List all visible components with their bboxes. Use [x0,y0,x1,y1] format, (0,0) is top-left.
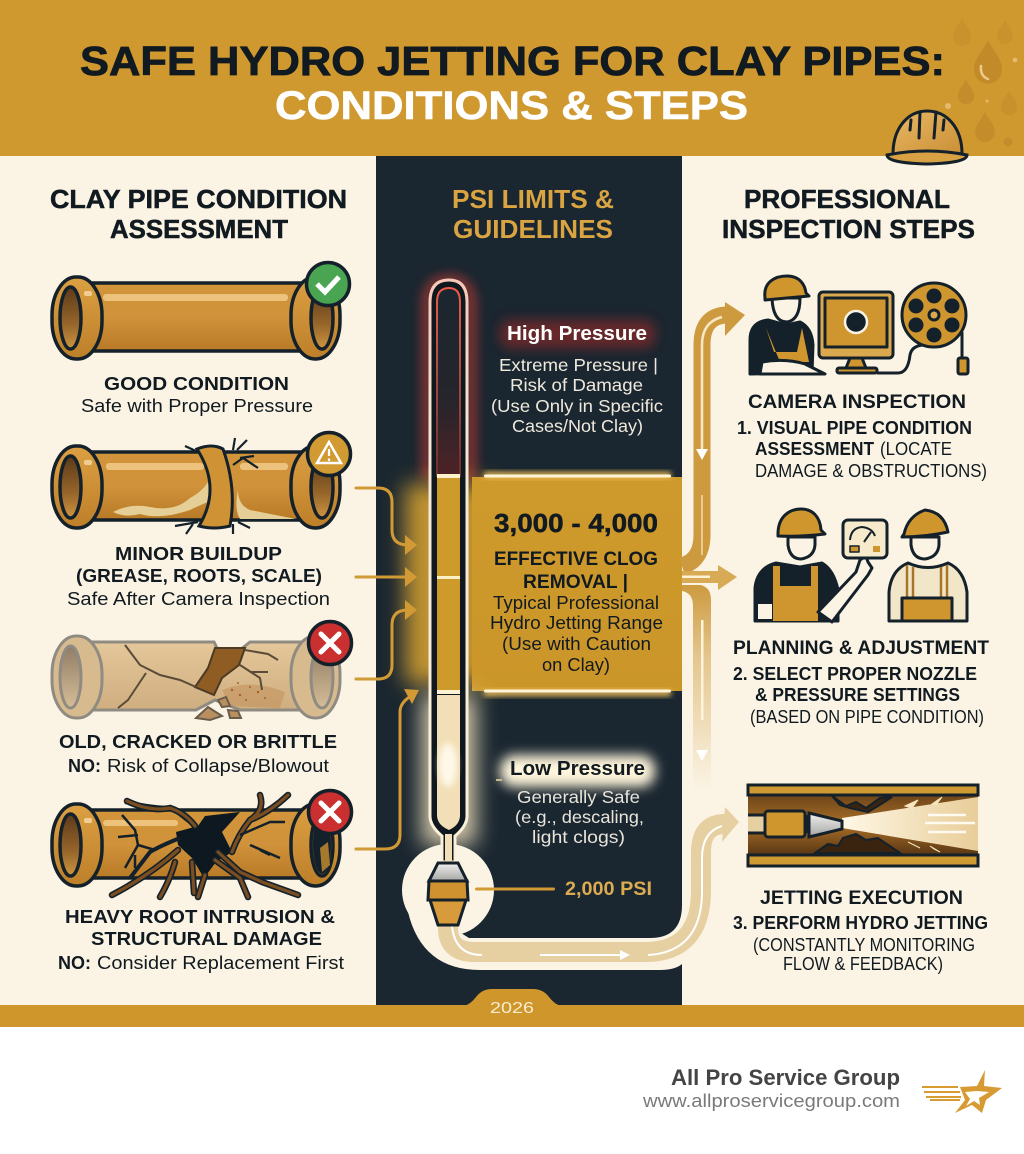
low pressure glow [422,695,655,845]
icon: green check badge [306,262,350,306]
heading: clay pipe condition assessment [50,184,347,244]
text: old cracked or brittle: OLD, CRACKED OR BRITTLE [59,731,337,752]
text: low pressure: (e.g., descaling, [515,807,644,827]
text: planning and adjustment: 2. SELECT PROPER NOZZLE [733,663,977,684]
heading: psi limits and guidelines: PSI LIMITS & [452,184,614,214]
cream flow channel [402,844,682,970]
icon: red x badge (roots) [308,790,352,834]
text: old cracked or brittle [59,731,337,776]
title: CONDITIONS & STEPS [275,84,748,128]
text: minor buildup [67,543,330,609]
text: old cracked or brittle: NO: [68,756,101,776]
icon: camera inspection [750,276,968,374]
pipe: old cracked [52,636,340,720]
heading: professional inspection steps: INSPECTION STEPS [722,214,975,244]
text: jetting execution: FLOW & FEEDBACK) [783,954,943,974]
text: 3,000 - 4,000 effective clog removal: REMOVAL | [523,572,628,593]
monitor [819,292,893,373]
pipe: good condition [52,277,340,359]
heading: professional inspection steps: PROFESSIONAL [744,184,950,214]
gauge tube [430,280,467,862]
gauge panel [843,520,887,558]
text: heavy root intrusion: STRUCTURAL DAMAGE [91,928,322,949]
icon: red x badge (cracked) [308,622,352,664]
text: high pressure: Extreme Pressure | [499,355,658,375]
low section [437,695,460,830]
text: jetting execution: JETTING EXECUTION [760,888,963,909]
year tab: 2026 [490,1000,534,1017]
text: 3,000 - 4,000 effective clog removal [490,508,663,675]
panel: clay pipe conditions [52,262,352,973]
text: high pressure: High Pressure [507,323,647,345]
second worker [889,510,967,621]
title [80,38,945,128]
text: minor buildup: (GREASE, ROOTS, SCALE) [76,565,322,586]
header band [0,0,1024,156]
text: low pressure: Generally Safe [517,787,640,807]
heading: psi limits and guidelines: GUIDELINES [453,214,613,244]
year tab [463,989,562,1017]
pipe: heavy root intrusion [52,795,340,897]
arrow: fading flow down [682,585,711,790]
text: 3,000 - 4,000 effective clog removal: 3,000 - 4,000 [494,508,658,538]
red high section [437,288,460,476]
icon: jetting execution [748,785,978,866]
text: camera inspection: CAMERA INSPECTION [748,392,966,413]
panel: high pressure glow [427,280,655,476]
label: 2,000 psi: 2,000 PSI [565,879,652,900]
icon: planning and adjustment [755,509,967,622]
text: planning and adjustment: PLANNING & ADJUSTMENT [733,638,989,659]
title: SAFE HYDRO JETTING FOR CLAY PIPES: [80,38,945,84]
text: low pressure [510,758,645,847]
text: jetting execution [733,888,988,974]
text: minor buildup: Safe After Camera Inspection [67,589,330,609]
footer brand text [642,1065,900,1111]
text: jetting execution: 3. PERFORM HYDRO JETTING [733,912,988,933]
text: heavy root intrusion: NO: [58,953,91,973]
text: camera inspection: ASSESSMENT [755,438,875,459]
text: planning and adjustment: & PRESSURE SETTINGS [755,684,960,705]
icon: warning badge [308,432,350,476]
cable reel [877,283,968,374]
text: high pressure: Cases/Not Clay) [512,416,643,436]
text: low pressure: light clogs) [532,827,625,847]
tube casing [430,280,467,862]
text: 3,000 - 4,000 effective clog removal: EFFECTIVE CLOG [494,549,658,570]
arrow: flow to camera inspection [682,302,745,566]
text: high pressure: Risk of Damage [510,375,643,395]
heading: psi limits and guidelines [452,184,614,244]
footer brand text: www.allproservicegroup.com [642,1091,900,1111]
bottom gold band [0,1005,1024,1027]
worker with gauge [755,509,872,622]
text: camera inspection [737,392,987,481]
icon: hard hat [887,111,967,164]
tan flow pipe to jetting arrow [448,807,739,960]
text: jetting execution: (CONSTANTLY MONITORING [753,935,975,955]
label: 2,000 psi [475,879,652,900]
text: good condition: Safe with Proper Pressure [81,396,313,416]
gold mid section [437,477,460,692]
arrow: flow to planning [682,565,737,590]
text: high pressure [491,323,663,436]
text: low pressure: Low Pressure [510,758,645,780]
pipe: minor buildup [52,438,340,534]
text: camera inspection: DAMAGE & OBSTRUCTIONS) [755,460,987,481]
text: good condition: GOOD CONDITION [104,373,289,394]
text: 3,000 - 4,000 effective clog removal: Hydro Jetting Range [490,613,663,633]
text: planning and adjustment [733,638,989,727]
heading: clay pipe condition assessment: CLAY PIPE CONDITION [50,184,347,214]
heading: professional inspection steps [722,184,975,244]
logo: gold star [922,1070,1002,1113]
text: old cracked or brittle: Risk of Collapse/Blowout [107,756,329,776]
text: camera inspection: (LOCATE [880,438,952,459]
text: planning and adjustment: (BASED ON PIPE CONDITION) [750,707,984,727]
text: 3,000 - 4,000 effective clog removal: Typical Professional [493,593,659,613]
text: 3,000 - 4,000 effective clog removal: on Clay) [542,655,610,675]
arrows: conditions to gauge [356,488,419,849]
dark center panel [376,156,682,1005]
worker [750,276,825,374]
footer brand text: All Pro Service Group [671,1065,900,1090]
text: 3,000 - 4,000 effective clog removal: (Use with Caution [502,634,651,654]
heading: clay pipe condition assessment: ASSESSMENT [110,214,288,244]
text: good condition [81,373,313,416]
water drops decoration [945,18,1017,146]
text: high pressure: (Use Only in Specific [491,396,663,416]
cream panels background [0,156,1024,1005]
panel: gold effective range [405,472,682,696]
text: heavy root intrusion [58,906,344,973]
text: heavy root intrusion: HEAVY ROOT INTRUSION & [65,906,335,927]
text: heavy root intrusion: Consider Replacement First [97,953,344,973]
text: minor buildup: MINOR BUILDUP [115,543,282,564]
nozzle [428,863,468,925]
text: camera inspection: 1. VISUAL PIPE CONDITION [737,417,972,438]
